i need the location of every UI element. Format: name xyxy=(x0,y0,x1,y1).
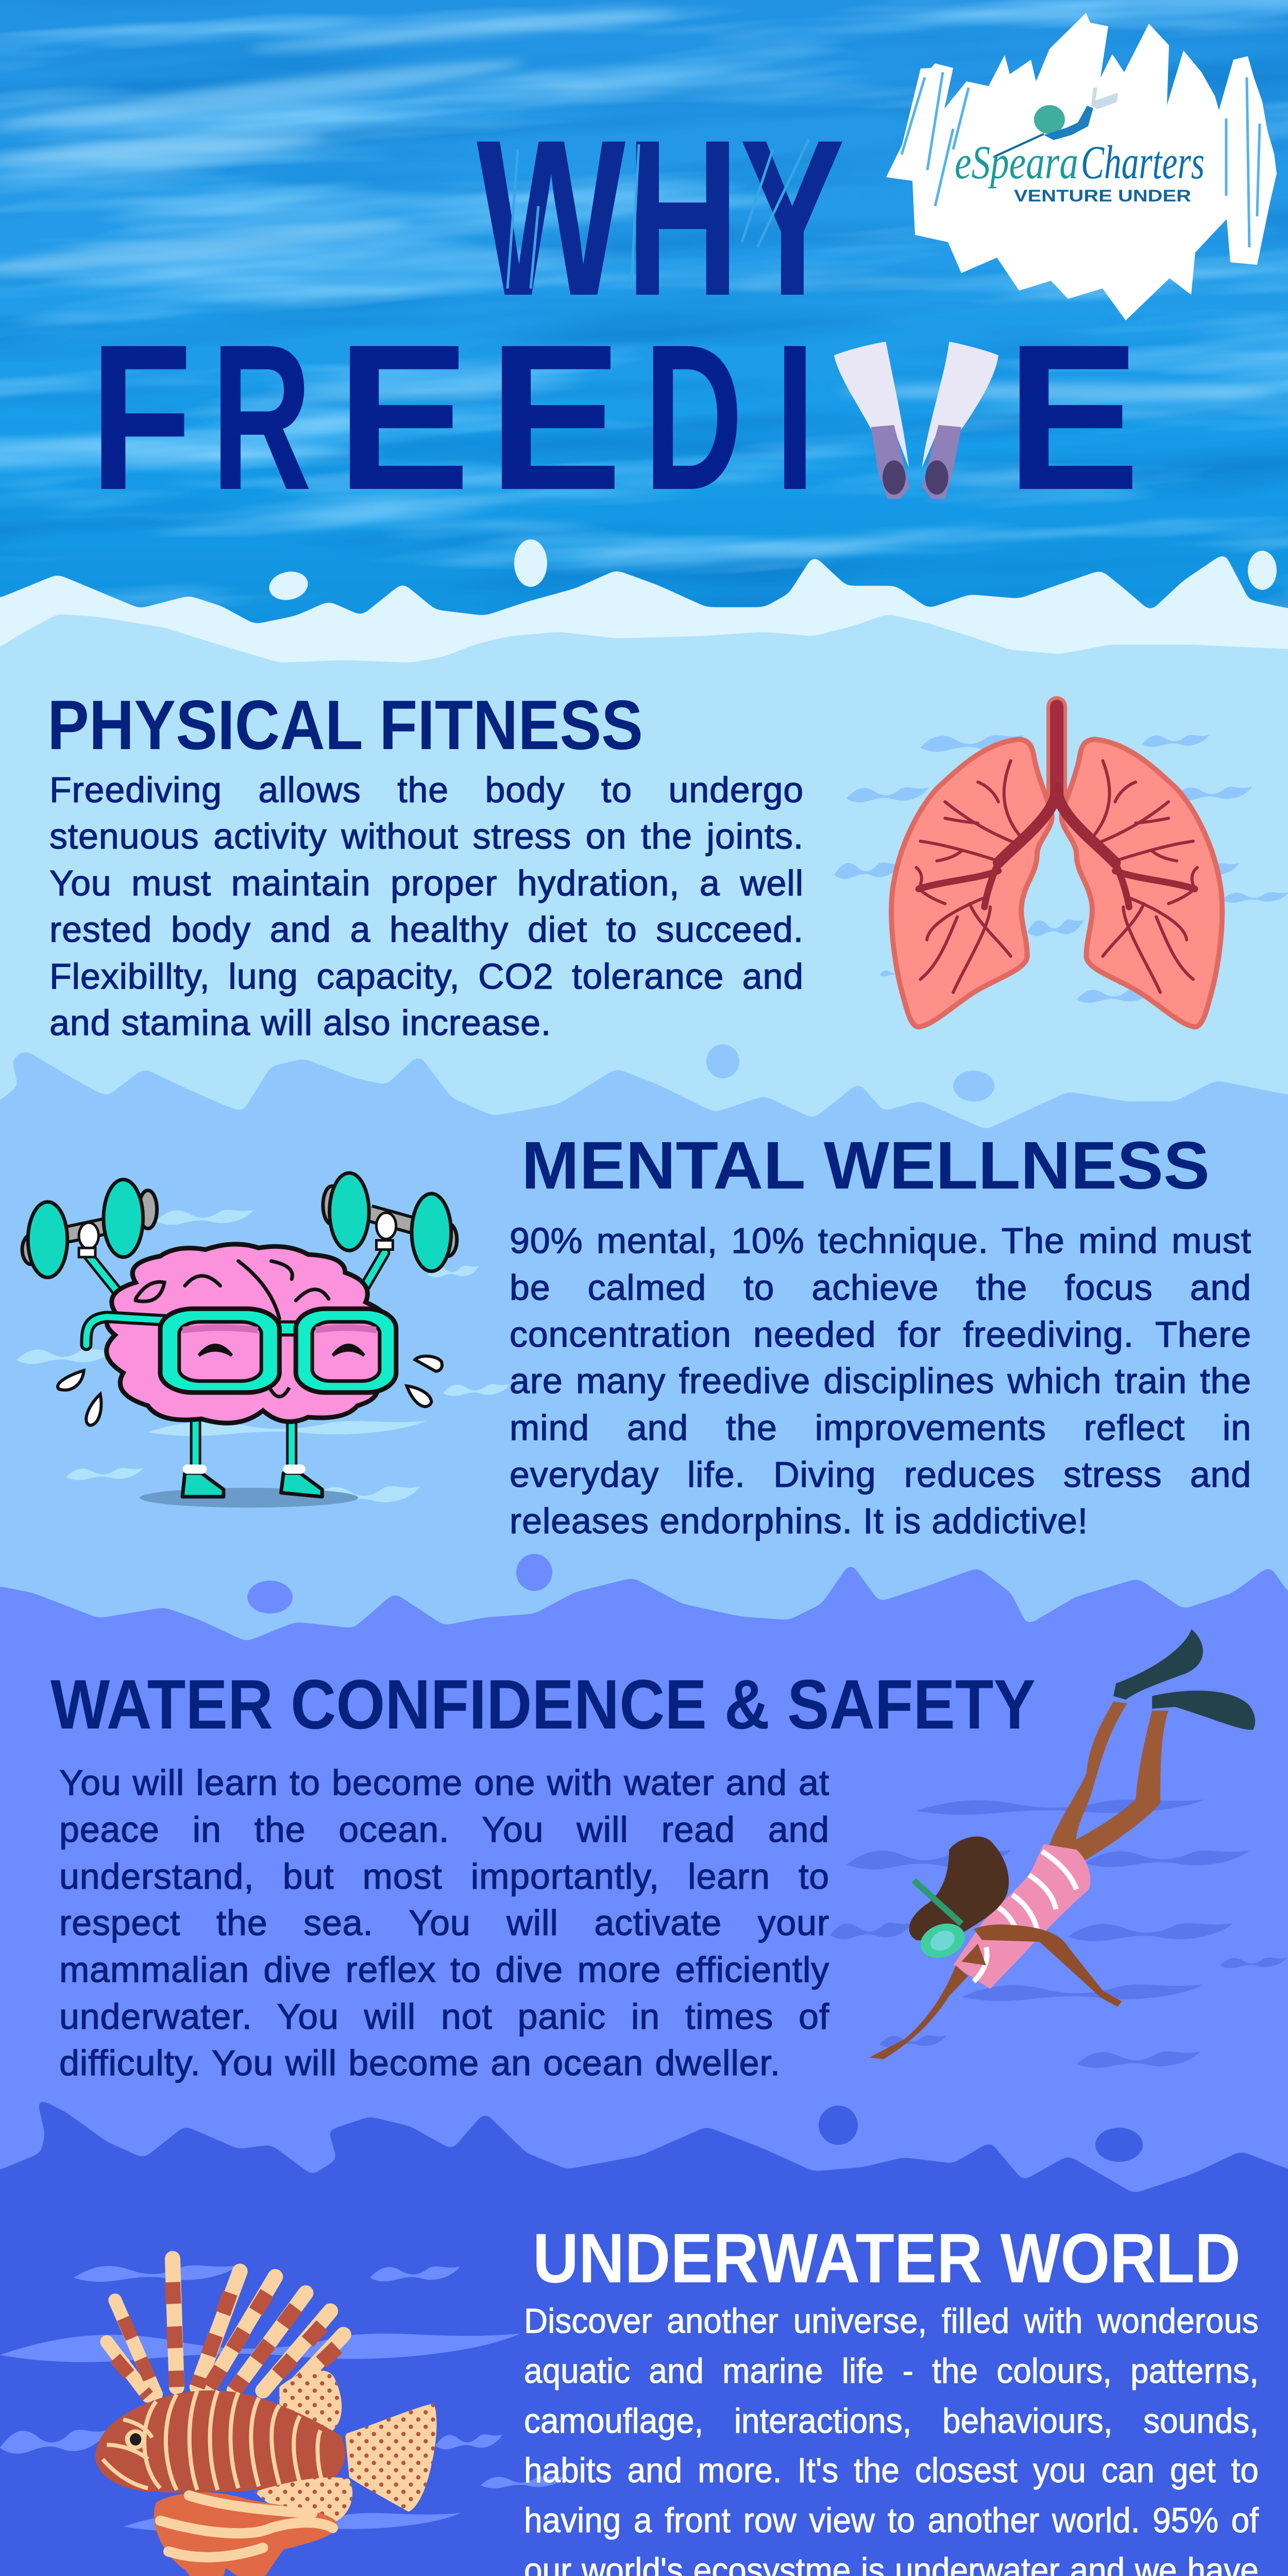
wave: water confidence band xyxy=(0,1562,1288,1716)
panel: underwater world xyxy=(0,2200,1288,2576)
icon: lungs xyxy=(889,696,1225,1029)
body text: underwater world: habits and more. It's the closest you can get to xyxy=(524,2451,1259,2490)
icon: swim fins forming the letter V xyxy=(834,342,998,499)
eye xyxy=(125,2429,146,2449)
dumbbells xyxy=(22,1173,457,1278)
title word: FREEDI: R xyxy=(211,301,312,533)
spines xyxy=(107,2259,344,2396)
ripples: underwater world xyxy=(0,2265,566,2576)
body text: water confidence xyxy=(59,1759,829,2087)
body text: water confidence: difficulty. You will become an ocean dweller. xyxy=(59,2043,781,2083)
body text: mental wellness: concentration needed for freediving. There xyxy=(510,1314,1251,1354)
body xyxy=(95,2391,345,2493)
body text: physical fitness: Flexibillty, lung capacity, CO2 tolerance and xyxy=(49,956,804,996)
logo text xyxy=(955,136,1205,205)
hands xyxy=(79,1213,396,1257)
logo text: eSpeara xyxy=(955,136,1078,189)
title word: FREEDI: E xyxy=(488,301,622,533)
brush stroke xyxy=(886,13,1277,320)
heading: mental wellness: MENTAL WELLNESS xyxy=(521,1127,1210,1203)
body text: water confidence: underwater. You will not panic in times of xyxy=(59,1996,829,2037)
legs and shoes xyxy=(182,1420,322,1497)
body text: water confidence: mammalian dive reflex to dive more efficiently xyxy=(59,1950,829,1990)
heading: physical fitness: PHYSICAL FITNESS xyxy=(47,686,643,764)
mental band droplets xyxy=(706,1044,994,1101)
icon: brain lifting dumbbells xyxy=(15,1170,459,1510)
wave: underwater world band xyxy=(0,2098,1288,2257)
logo: eSpeara Charters on white brush stroke xyxy=(692,13,1277,466)
body text: water confidence: peace in the ocean. You will read and xyxy=(59,1809,829,1850)
body text: underwater world: camouflage, interactions, behaviours, sounds, xyxy=(524,2401,1259,2441)
shadow xyxy=(140,1488,358,1507)
title word: FREEDI: D xyxy=(644,301,743,533)
ripples: mental wellness xyxy=(16,1210,510,1504)
logo text: Charters xyxy=(1081,136,1205,189)
ripples: physical fitness xyxy=(834,735,1288,1003)
icon: diver in striped swimsuit xyxy=(860,1628,1262,2071)
face xyxy=(199,1345,364,1397)
body text: mental wellness: 90% mental, 10% technique. The mind must xyxy=(510,1221,1251,1261)
body text: physical fitness xyxy=(49,770,804,1043)
title word: FREEDI: F xyxy=(90,301,192,533)
logo text: VENTURE UNDER xyxy=(1014,187,1191,205)
body text: mental wellness: everyday life. Diving reduces stress and xyxy=(510,1454,1251,1495)
water band droplets xyxy=(247,1554,552,1614)
title: WHY FREEDIVE xyxy=(90,31,1251,533)
pectoral fin xyxy=(154,2493,337,2576)
title letter: final E: E xyxy=(1006,301,1140,533)
foam droplets xyxy=(266,539,1277,603)
body text: physical fitness: You must maintain proper hydration, a well xyxy=(49,863,804,903)
body text: mental wellness: releases endorphins. It is addictive! xyxy=(510,1501,1088,1541)
body text: mental wellness xyxy=(510,1217,1251,1545)
panel: physical fitness xyxy=(47,686,1225,1043)
title word: FREEDI: I xyxy=(774,301,816,533)
body text: physical fitness: and stamina will also increase. xyxy=(49,1003,551,1043)
body text: water confidence: You will learn to become one with water and at xyxy=(59,1762,829,1803)
body text: water confidence: respect the sea. You will activate your xyxy=(59,1903,829,1943)
wave: mental wellness band xyxy=(0,1050,1288,1203)
body text: underwater world xyxy=(524,2296,1259,2576)
wave: pale foam xyxy=(0,553,1288,726)
glasses xyxy=(86,1309,396,1393)
lower dorsal pouch xyxy=(255,2477,352,2522)
body text: mental wellness: mind and the improvements reflect in xyxy=(510,1408,1251,1448)
sweat drops xyxy=(58,1356,442,1426)
body text: physical fitness: stenuous activity without stress on the joints. xyxy=(49,816,804,856)
underwater band droplets xyxy=(819,2106,1143,2162)
body text: underwater world: aquatic and marine life - the colours, patterns, xyxy=(524,2351,1259,2391)
wave: physical fitness band xyxy=(0,614,1288,769)
body text: physical fitness: Freediving allows the body to undergo xyxy=(49,770,804,810)
body text: underwater world: having a front row view to another world. 95% of xyxy=(524,2501,1259,2540)
heading: water confidence and safety: WATER CONFIDENCE & SAFETY xyxy=(50,1665,1036,1743)
icon: lionfish xyxy=(88,2246,448,2576)
body text: underwater world: Discover another universe, filled with wonderous xyxy=(524,2301,1259,2341)
title word: FREEDI xyxy=(90,301,816,533)
panel: mental wellness xyxy=(0,1123,1288,1551)
ripples: water confidence xyxy=(830,1800,1287,2068)
arms xyxy=(86,1253,384,1299)
tail xyxy=(345,2403,436,2512)
diver silhouette xyxy=(994,88,1118,157)
brain xyxy=(107,1244,392,1423)
body text: mental wellness: be calmed to achieve the focus and xyxy=(510,1267,1251,1308)
body text: water confidence: understand, but most importantly, learn to xyxy=(59,1856,829,1896)
panel: water confidence and safety xyxy=(0,1623,1288,2117)
title word: FREEDI: E xyxy=(336,301,470,533)
panel: header title and logo xyxy=(90,13,1277,533)
rear dorsal pouch xyxy=(279,2370,342,2436)
body text: physical fitness: rested body and a healthy diet to succeed. xyxy=(49,909,804,950)
body text: mental wellness: are many freedive disciplines which train the xyxy=(510,1361,1251,1401)
title word: WHY: WHY xyxy=(477,93,845,342)
